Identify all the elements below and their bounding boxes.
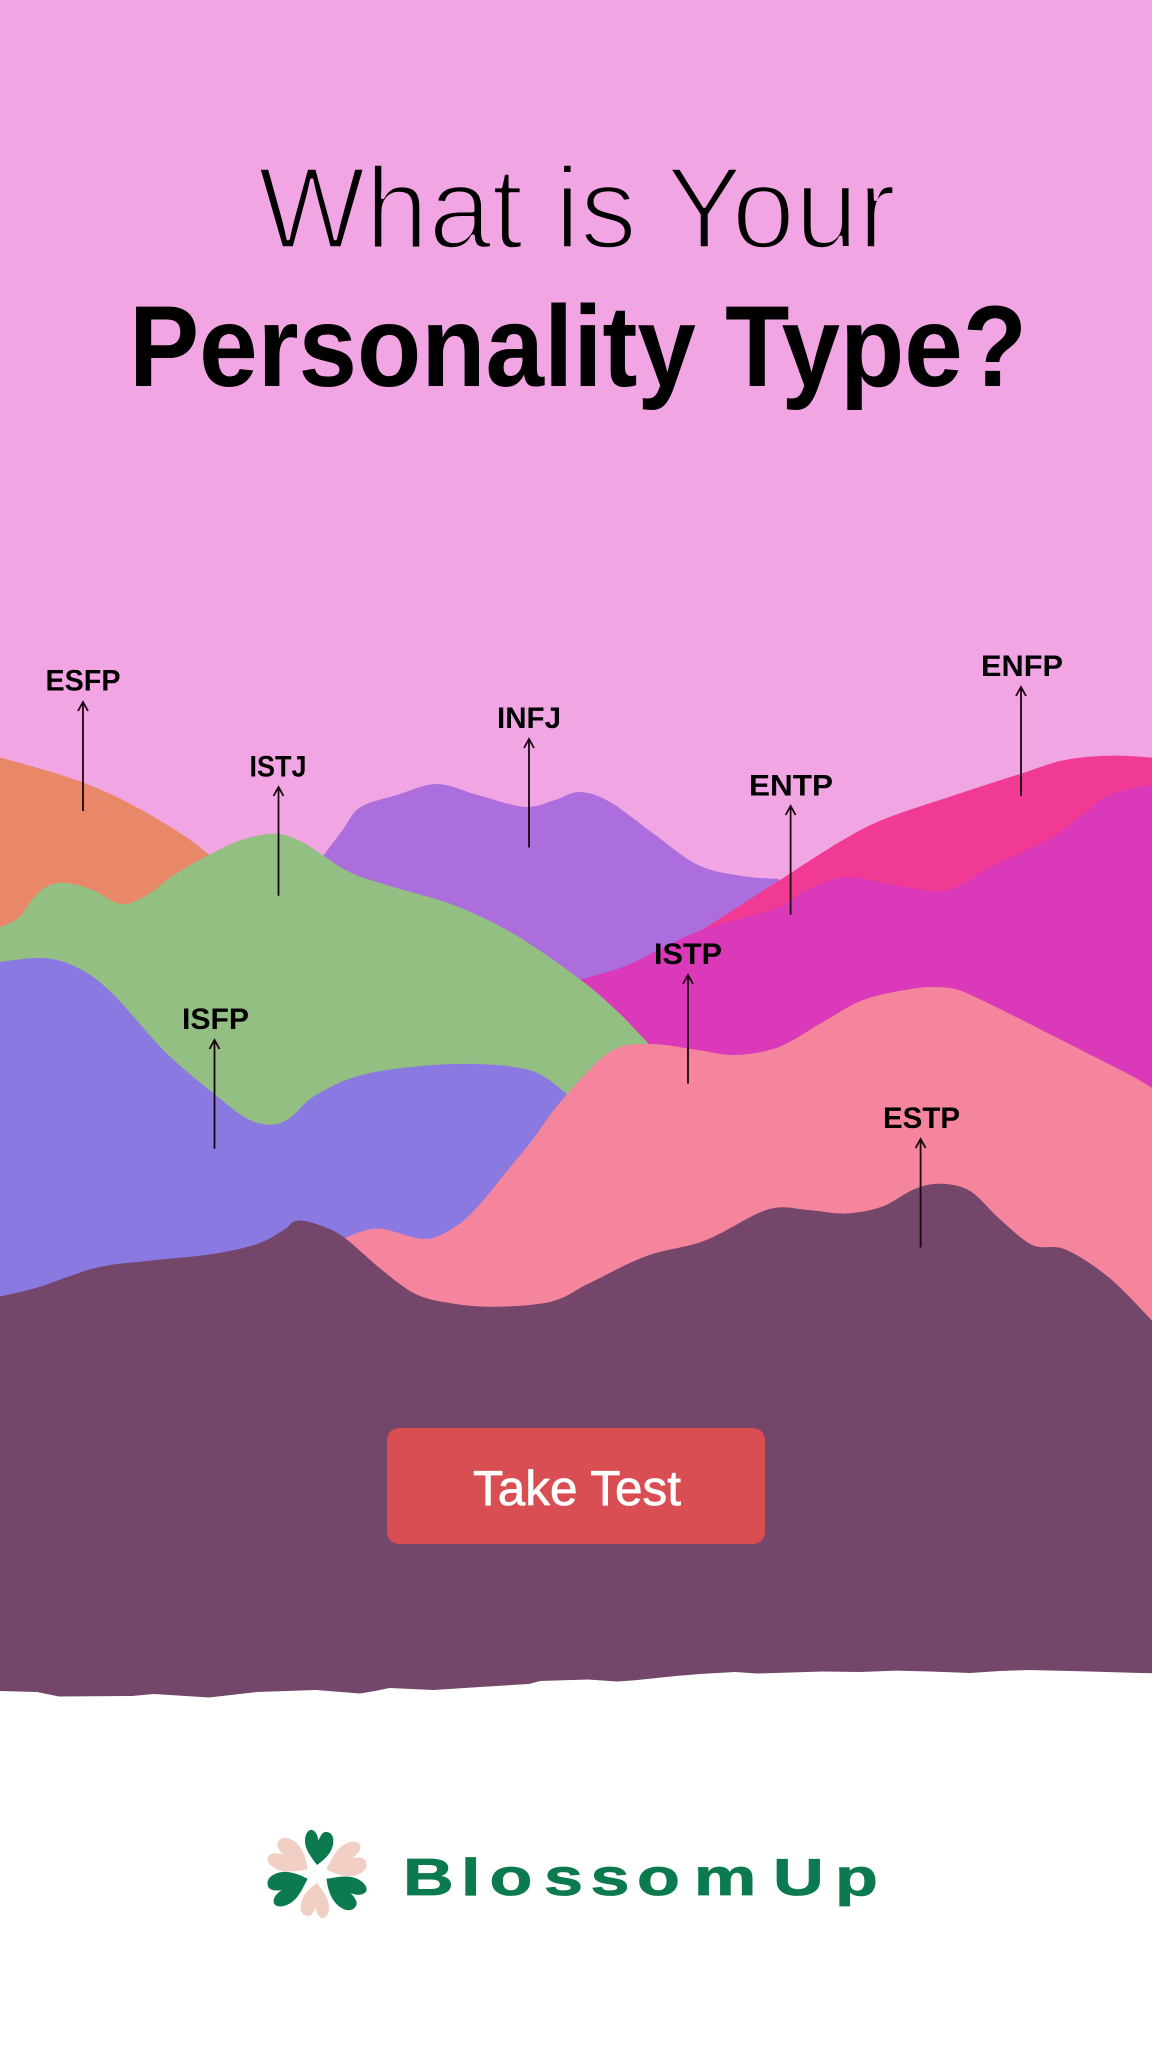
title line 2: Personality Type?	[129, 283, 1027, 411]
label: ESFP: ESFP	[46, 665, 120, 698]
label: ENFP: ENFP	[981, 650, 1063, 683]
layer: ESTP dark plum hill	[0, 1184, 1152, 1698]
layer: ENFP hot pink hill	[702, 756, 1152, 1000]
icon: heart flower	[262, 1830, 372, 1918]
label: ENTP: ENTP	[749, 770, 833, 803]
label: ENTP	[749, 770, 833, 915]
label: ISTP	[654, 938, 722, 1084]
label: ESTP	[883, 1102, 960, 1248]
label: INFJ: INFJ	[497, 702, 561, 735]
label: ESFP	[46, 665, 120, 811]
label: INFJ	[497, 702, 561, 848]
button: Take Test: Take Test	[473, 1462, 681, 1516]
logo: BlossomUp	[262, 1830, 878, 1918]
label: ISTJ	[250, 750, 306, 896]
label: ENFP	[981, 650, 1063, 796]
wordmark: BlossomUp	[403, 1849, 878, 1907]
layer: ISTJ green hill	[0, 834, 650, 1300]
layer: INFJ purple hill	[323, 784, 779, 1050]
label: ISTP: ISTP	[654, 938, 722, 971]
label: ISTJ: ISTJ	[250, 750, 306, 783]
label: ESTP: ESTP	[883, 1102, 960, 1135]
background	[0, 0, 1152, 1400]
label: ISFP: ISFP	[182, 1003, 249, 1036]
label: ISFP	[182, 1003, 249, 1149]
layer: ENTP magenta hill	[580, 786, 1152, 1200]
title	[129, 143, 1027, 411]
button: Take Test	[387, 1428, 765, 1544]
layer: ISFP periwinkle hill	[0, 958, 580, 1400]
layer: ISTP salmon hill	[345, 987, 1152, 1400]
title line 1: What is Your	[258, 143, 896, 273]
layer: ESFP orange hill	[0, 758, 240, 1000]
